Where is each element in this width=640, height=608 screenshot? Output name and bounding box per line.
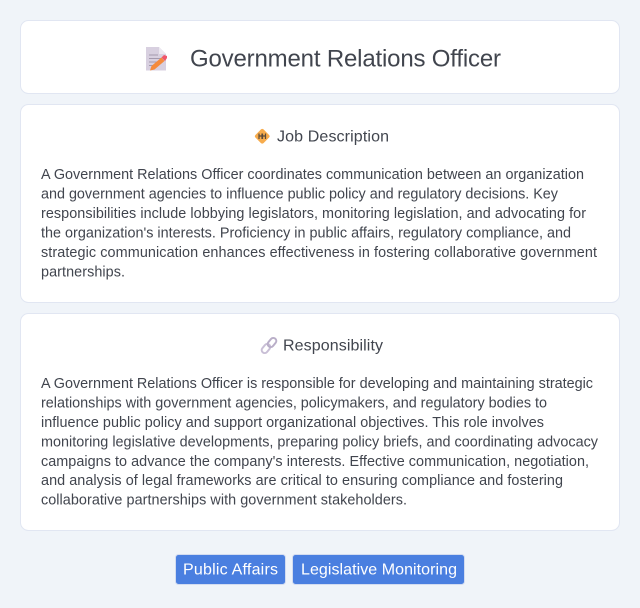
job description body text: strategic communication enhances effectiveness in fostering collaborative government bbox=[41, 245, 597, 261]
responsibility body text: collaborative partnerships with government stakeholders. bbox=[41, 492, 407, 508]
icon: document with pencil bbox=[146, 47, 167, 70]
job description heading: Job Description bbox=[277, 128, 389, 146]
panel: job description bbox=[20, 104, 620, 302]
tag: legislative monitoring: Legislative Monitoring bbox=[301, 562, 457, 578]
responsibility body text: A Government Relations Officer is responsible for developing and maintaining strategic bbox=[41, 376, 593, 392]
job description body text: responsibilities include lobbying legislators, monitoring legislation, and advocating for bbox=[41, 206, 586, 222]
responsibility body text bbox=[41, 376, 599, 508]
responsibility body text: and analysis of legal frameworks are critical to ensuring compliance and fostering bbox=[41, 473, 563, 489]
panel: title bbox=[20, 20, 620, 94]
tag: public affairs bbox=[176, 554, 286, 584]
job description body text: the organization's interests. Proficiency in public affairs, regulatory compliance, and bbox=[41, 226, 571, 242]
tag: legislative monitoring bbox=[292, 554, 464, 584]
responsibility body text: influence public policy and support organizational objectives. This role involves bbox=[41, 415, 544, 431]
responsibility body text: campaigns to advance the company's interests. Effective communication, negotiation, bbox=[41, 454, 589, 470]
icon: diamond sign bbox=[254, 128, 270, 144]
tag: public affairs: Public Affairs bbox=[183, 562, 278, 578]
responsibility heading: Responsibility bbox=[283, 338, 383, 354]
icon: chain link bbox=[260, 337, 278, 354]
job description body text: A Government Relations Officer coordinates communication between an organization bbox=[41, 167, 584, 183]
panel: responsibility bbox=[20, 314, 620, 530]
job description body text: and government agencies to influence public policy and regulatory decisions. Key bbox=[41, 186, 559, 202]
title text: Government Relations Officer bbox=[190, 46, 501, 72]
job description body text bbox=[41, 167, 597, 280]
responsibility body text: monitoring legislative developments, preparing policy briefs, and coordinating advocacy bbox=[41, 434, 599, 450]
responsibility body text: relationships with government agencies, policymakers, and regulatory bodies to bbox=[41, 396, 547, 412]
job description body text: partnerships. bbox=[41, 264, 125, 280]
